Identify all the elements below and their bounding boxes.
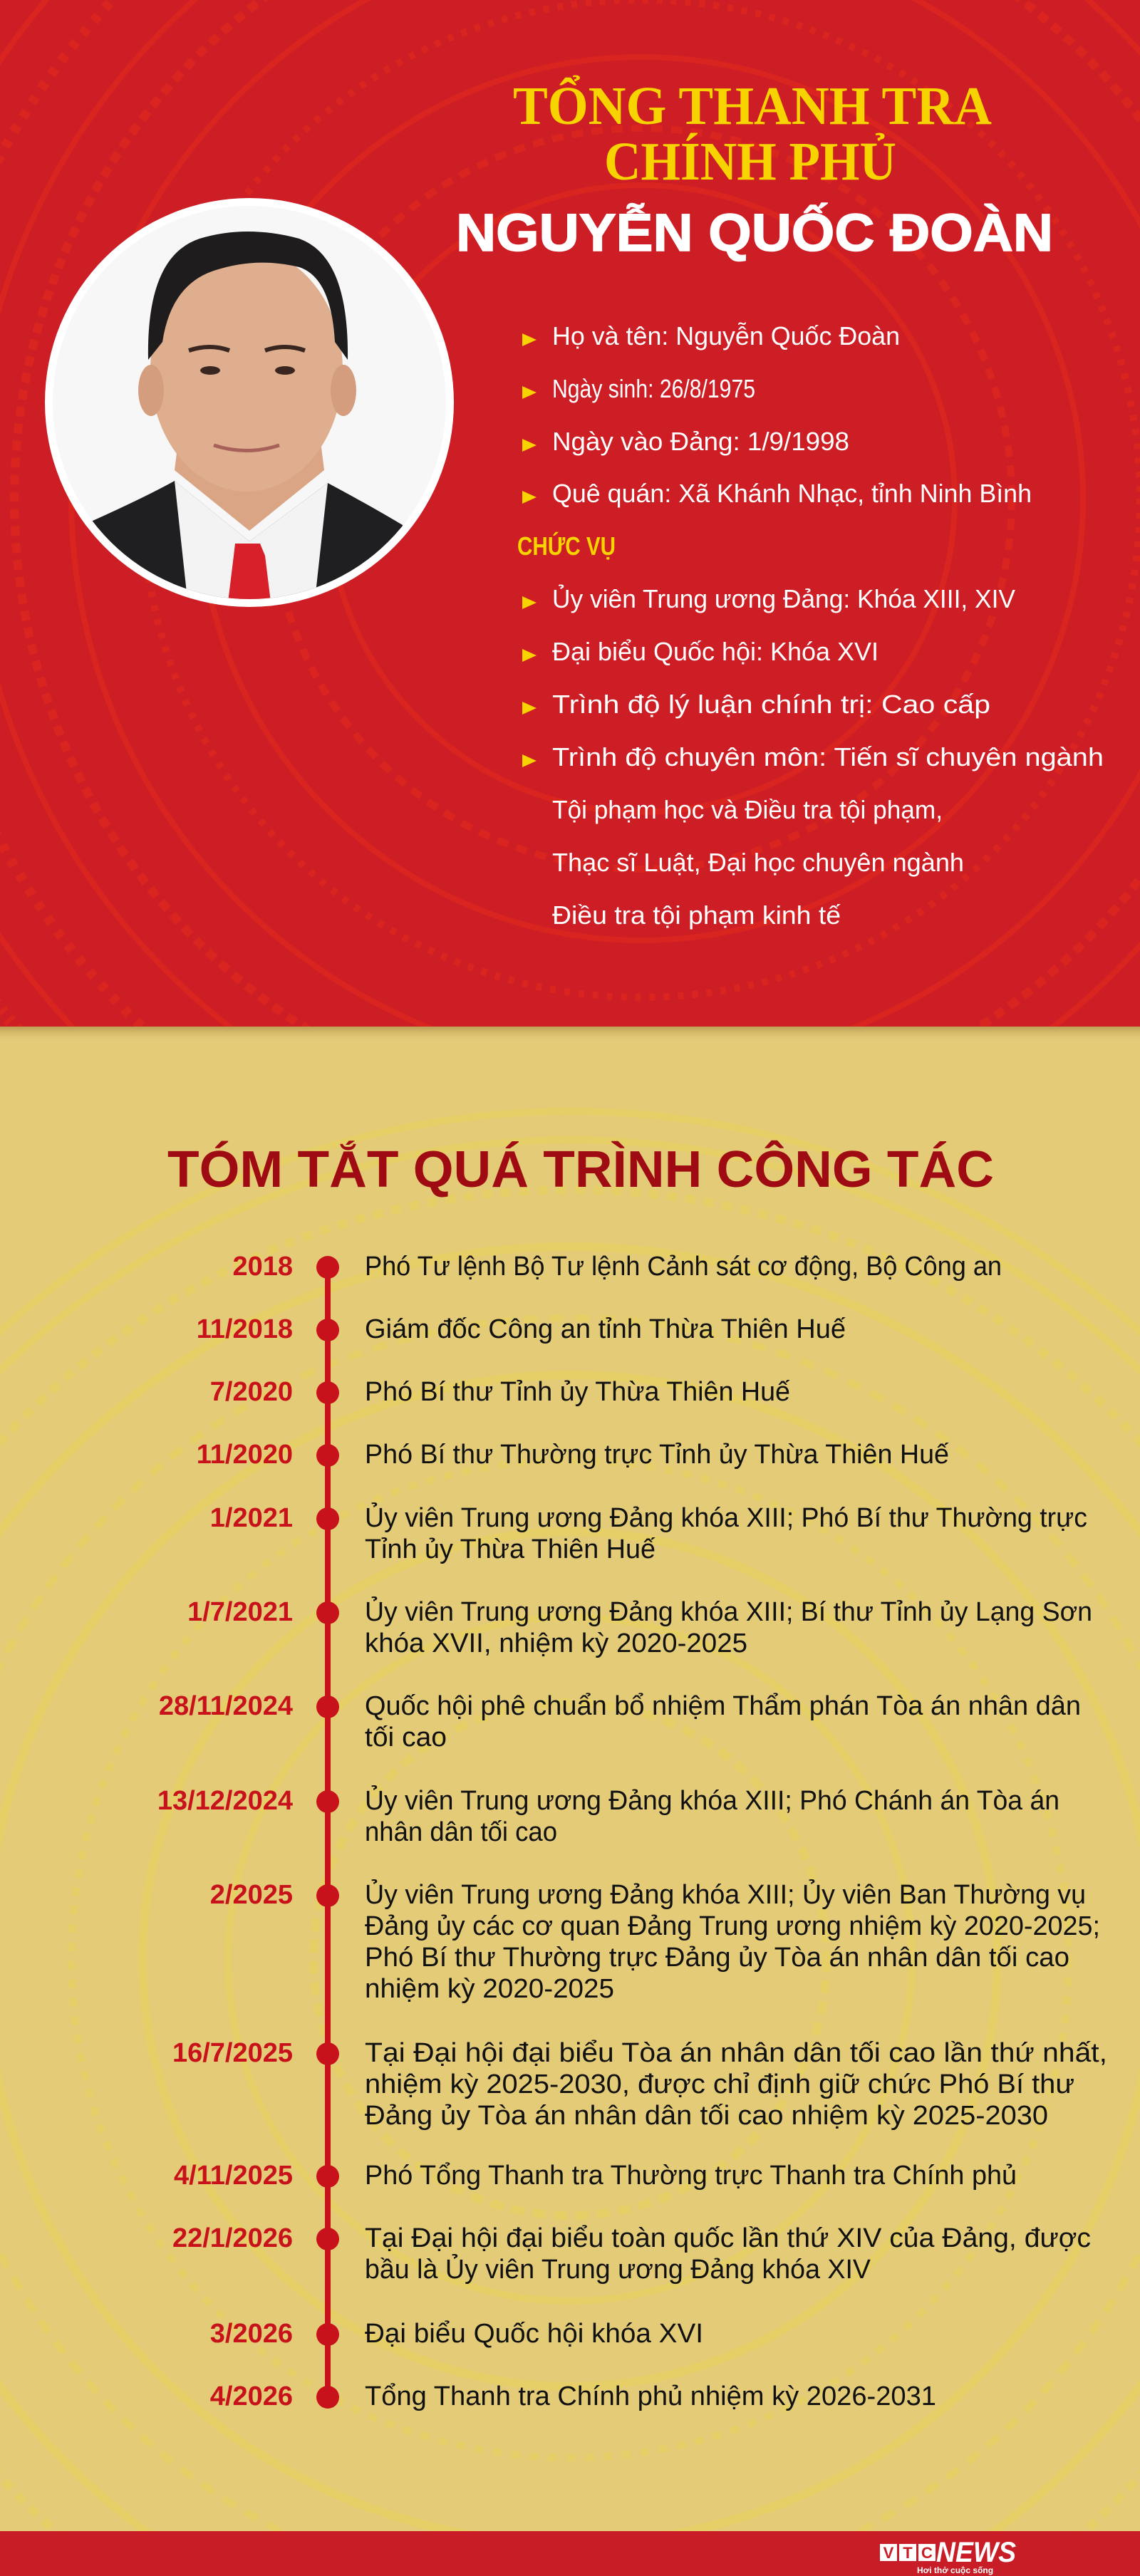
- timeline descriptions: Ủy viên Trung ương Đảng khóa XIII; Phó Bí thư Thường trực: [365, 1502, 1087, 1533]
- timeline descriptions: nhân dân tối cao: [365, 1817, 557, 1847]
- timeline descriptions: Ủy viên Trung ương Đảng khóa XIII; Ủy viên Ban Thường vụ: [365, 1879, 1086, 1910]
- personal info list: Điều tra tội phạm kinh tế: [552, 900, 841, 930]
- title: position: CHÍNH PHỦ: [604, 132, 896, 192]
- timeline descriptions: Đảng ủy Tòa án nhân dân tối cao nhiệm kỳ 2025-2030: [365, 2101, 1048, 2131]
- timeline dates: 1/2021: [210, 1503, 293, 1533]
- timeline dates: 11/2020: [197, 1440, 293, 1470]
- timeline dates: 2/2025: [210, 1880, 293, 1910]
- timeline dates: 28/11/2024: [159, 1691, 293, 1721]
- title: position: [513, 76, 992, 192]
- logo: VTC NEWS: Hơi thở cuộc sống: [917, 2565, 993, 2575]
- personal info list: [517, 321, 1104, 930]
- heading: timeline: TÓM TẮT QUÁ TRÌNH CÔNG TÁC: [167, 1141, 994, 1198]
- timeline descriptions: Đảng ủy các cơ quan Đảng Trung ương nhiệm kỳ 2020-2025;: [365, 1911, 1100, 1941]
- timeline descriptions: bầu là Ủy viên Trung ương Đảng khóa XIV: [365, 2253, 871, 2285]
- timeline dates: 7/2020: [210, 1377, 293, 1407]
- timeline descriptions: Phó Tổng Thanh tra Thường trực Thanh tra Chính phủ: [365, 2161, 1017, 2191]
- timeline descriptions: Đại biểu Quốc hội khóa XVI: [365, 2319, 703, 2349]
- timeline descriptions: Giám đốc Công an tỉnh Thừa Thiên Huế: [365, 1314, 846, 1344]
- timeline descriptions: Ủy viên Trung ương Đảng khóa XIII; Bí thư Tỉnh ủy Lạng Sơn: [365, 1596, 1092, 1627]
- timeline descriptions: nhiệm kỳ 2020-2025: [365, 1974, 614, 2004]
- timeline descriptions: Phó Bí thư Tỉnh ủy Thừa Thiên Huế: [365, 1377, 790, 1407]
- timeline descriptions: Tỉnh ủy Thừa Thiên Huế: [365, 1534, 656, 1564]
- timeline dates: 13/12/2024: [157, 1786, 293, 1816]
- timeline dates: 4/2026: [210, 2382, 293, 2411]
- timeline dates: 3/2026: [210, 2319, 293, 2349]
- panel: yellow timeline background: [0, 1027, 1140, 2576]
- timeline dates: [157, 1252, 293, 2411]
- timeline descriptions: nhiệm kỳ 2025-2030, được chỉ định giữ chức Phó Bí thư: [365, 2069, 1074, 2099]
- portrait photo: [43, 198, 456, 613]
- title: name: NGUYỄN QUỐC ĐOÀN: [456, 203, 1053, 262]
- timeline descriptions: Tại Đại hội đại biểu Tòa án nhân dân tối cao lần thứ nhất,: [365, 2038, 1107, 2068]
- personal info list: CHỨC VỤ: [517, 531, 616, 561]
- title: position: TỔNG THANH TRA: [513, 76, 992, 136]
- personal info list: Ủy viên Trung ương Đảng: Khóa XIII, XIV: [552, 583, 1015, 613]
- timeline descriptions: Phó Bí thư Thường trực Đảng ủy Tòa án nhân dân tối cao: [365, 1943, 1069, 1973]
- timeline dates: 1/7/2021: [187, 1597, 293, 1627]
- timeline dates: 11/2018: [197, 1314, 293, 1344]
- timeline descriptions: Phó Tư lệnh Bộ Tư lệnh Cảnh sát cơ động, Bộ Công an: [365, 1252, 1002, 1282]
- personal info list: Tội phạm học và Điều tra tội phạm,: [552, 795, 943, 824]
- timeline descriptions: Phó Bí thư Thường trực Tỉnh ủy Thừa Thiên Huế: [365, 1440, 949, 1470]
- timeline descriptions: khóa XVII, nhiệm kỳ 2020-2025: [365, 1629, 747, 1658]
- timeline dates: 16/7/2025: [172, 2038, 293, 2068]
- timeline descriptions: [365, 1252, 1107, 2411]
- personal info list: Họ và tên: Nguyễn Quốc Đoàn: [552, 321, 900, 350]
- bullet icons: [522, 333, 537, 767]
- timeline descriptions: Quốc hội phê chuẩn bổ nhiệm Thẩm phán Tòa án nhân dân: [365, 1691, 1081, 1721]
- personal info list: Trình độ lý luận chính trị: Cao cấp: [552, 690, 990, 719]
- logo: VTC NEWS: T: [903, 2544, 913, 2562]
- timeline descriptions: Tại Đại hội đại biểu toàn quốc lần thứ XIV của Đảng, được: [365, 2223, 1091, 2253]
- timeline descriptions: Ủy viên Trung ương Đảng khóa XIII; Phó Chánh án Tòa án: [365, 1785, 1059, 1816]
- logo: VTC NEWS: [880, 2537, 1016, 2575]
- personal info list: Ngày sinh: 26/8/1975: [552, 374, 755, 403]
- personal info list: Ngày vào Đảng: 1/9/1998: [552, 427, 849, 456]
- logo: VTC NEWS: C: [921, 2544, 933, 2562]
- timeline descriptions: Tổng Thanh tra Chính phủ nhiệm kỳ 2026-2031: [365, 2382, 936, 2411]
- personal info list: Đại biểu Quốc hội: Khóa XVI: [552, 637, 879, 666]
- timeline dates: 2018: [232, 1252, 293, 1282]
- panel: red header background: [0, 0, 1140, 1318]
- personal info list: Trình độ chuyên môn: Tiến sĩ chuyên ngành: [552, 742, 1104, 772]
- personal info list: Thạc sĩ Luật, Đại học chuyên ngành: [552, 848, 964, 877]
- timeline descriptions: tối cao: [365, 1723, 447, 1752]
- logo: VTC NEWS: V: [884, 2544, 894, 2562]
- timeline: [157, 1252, 1107, 2411]
- timeline dates: 4/11/2025: [174, 2161, 293, 2191]
- footer bar: [0, 2531, 1140, 2576]
- personal info list: Quê quán: Xã Khánh Nhạc, tỉnh Ninh Bình: [552, 479, 1032, 508]
- timeline dates: 22/1/2026: [172, 2223, 293, 2253]
- logo: VTC NEWS: NEWS: [936, 2537, 1016, 2568]
